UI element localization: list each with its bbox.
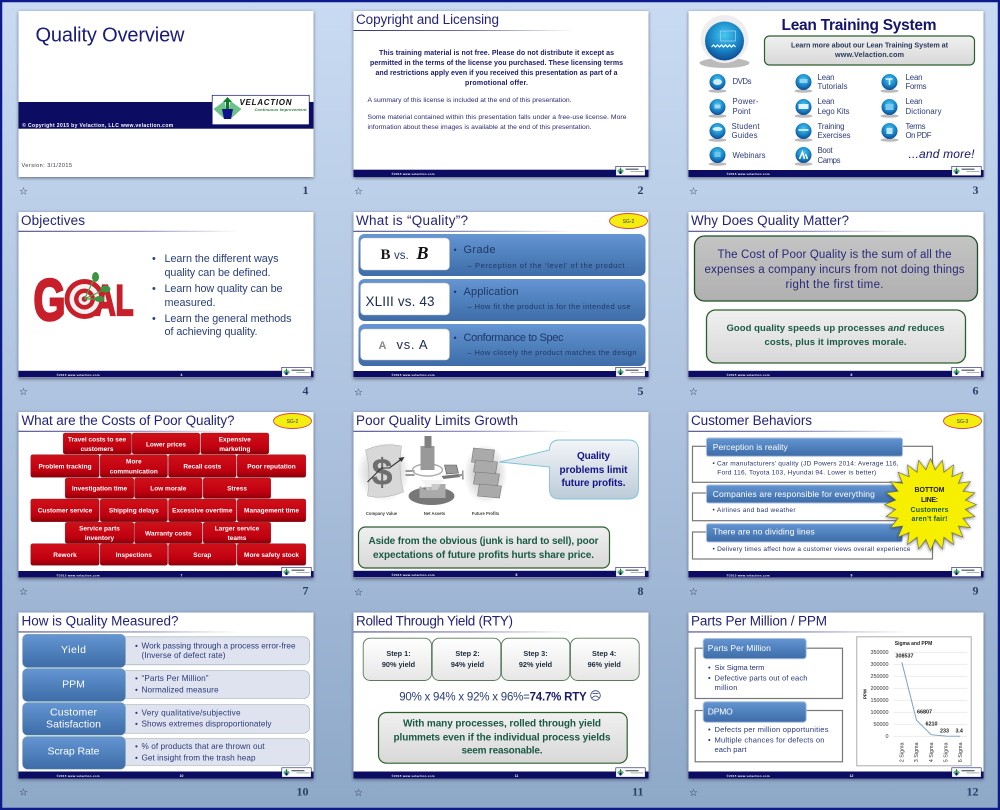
brick wall of costs: Travel costs to see: [68, 436, 126, 444]
panel: DPMO: [695, 702, 842, 762]
footer bar: [354, 567, 648, 578]
slide number: 12: [966, 784, 978, 798]
training item labels: Lean: [818, 73, 834, 82]
icon: goal target: AL: [94, 277, 134, 325]
step boxes: 92% yield: [519, 660, 552, 669]
line chart: sigma and PPM: 4 Sigma: [929, 742, 935, 762]
row: customer satisfaction: [22, 702, 310, 735]
row: customer satisfaction: Shows extremes disproportionately: [142, 720, 272, 728]
panel: share price note: [358, 527, 610, 568]
footer bar: 4: [181, 373, 183, 377]
badge: SG-2: SG-2: [287, 419, 299, 425]
slide number: 4: [302, 384, 308, 398]
line chart: sigma and PPM: 6210: [926, 722, 938, 728]
objectives list: •: [152, 283, 156, 295]
step boxes: Step 2:: [455, 649, 480, 658]
brick wall of costs: Stress: [227, 486, 247, 492]
license summary text: information about these images is available at the end of this presentation.: [368, 124, 592, 131]
footer bar: ©2015 www.velaction.com: [56, 573, 100, 577]
line chart: sigma and PPM: 3 Sigma: [914, 742, 920, 762]
training item labels: [732, 73, 942, 165]
star icon: ☆: [689, 387, 698, 398]
callout: quality problems: [500, 440, 638, 499]
slide title: Customer Behaviors: [691, 413, 812, 428]
star icon: ☆: [354, 788, 363, 799]
panel: companies responsible: Companies are responsible for everything: [713, 489, 875, 499]
footer bar: ©2015 www.velaction.com: [392, 172, 435, 176]
brick wall of costs: teams: [228, 535, 247, 542]
brick wall of costs: Excessive overtime: [172, 507, 233, 514]
slide title: Why Does Quality Matter?: [691, 213, 849, 228]
row: application: XLIII vs. 43: [366, 294, 434, 309]
row: scrap rate: Scrap Rate: [48, 746, 100, 758]
panel: good quality: [706, 310, 966, 363]
row: customer satisfaction: Satisfaction: [46, 718, 101, 730]
RTY formula: 90% x 94% x 92% x 96%=74.7% RTY: [399, 692, 587, 704]
footer bar: 9: [851, 573, 853, 577]
row: PPM: PPM: [62, 678, 85, 690]
star icon: ☆: [19, 587, 28, 598]
row: yield: Yield: [61, 644, 86, 656]
slide 8: poor quality limits growth: [354, 412, 648, 598]
illustration: company value equation: [356, 436, 508, 505]
panel: RTY note: [378, 712, 627, 763]
line chart: sigma and PPM: 350000: [870, 650, 888, 656]
footer bar: ©2015 www.velaction.com: [392, 774, 435, 778]
training item labels: Exercises: [818, 131, 851, 140]
objectives list: •: [152, 253, 156, 265]
illustration labels: Company Value: [366, 511, 398, 516]
step boxes: 94% yield: [451, 660, 484, 669]
training item labels: On PDF: [906, 131, 932, 140]
brick wall of costs: Problem tracking: [38, 464, 92, 470]
slide title: Objectives: [21, 213, 85, 228]
row: yield: [22, 634, 310, 668]
row: conformance: vs. A: [396, 337, 428, 352]
icon orbs: [708, 74, 898, 166]
star icon: ☆: [354, 388, 363, 398]
footer bar: 12: [850, 774, 853, 778]
slide 3: lean training system: [688, 11, 984, 198]
slide title: Parts Per Million / PPM: [691, 614, 827, 628]
row: customer satisfaction: Customer: [50, 706, 98, 718]
panel: parts per million: •: [708, 663, 711, 672]
line chart: sigma and PPM: 150000: [870, 698, 888, 704]
callout: bottom line starburst: aren’t fair!: [912, 516, 948, 523]
objectives list: Learn the general methods: [164, 313, 292, 325]
callout: bottom line starburst: [884, 459, 976, 551]
footer bar: [688, 768, 984, 778]
navy band: [18, 102, 314, 129]
training item labels: Guides: [732, 131, 758, 140]
panel: cost of poor quality: The Cost of Poor Quality is the sum of all the: [718, 249, 952, 261]
panel: perception is reality: • Car manufacturers’ quality (JD Powers 2014: Average 116,: [712, 460, 899, 467]
step boxes: [363, 638, 639, 680]
row: PPM: “Parts Per Million”: [142, 674, 209, 683]
brick wall of costs: Low morale: [150, 486, 187, 492]
license notice: [370, 50, 623, 87]
row: grade: B: [380, 247, 391, 263]
training item labels: Lean: [906, 73, 922, 82]
training item labels: Training: [818, 122, 844, 131]
license summary text: Some material contained within this presentation falls under a free-use license. More: [368, 114, 627, 121]
star icon: ☆: [19, 186, 28, 198]
slide title: Rolled Through Yield (RTY): [356, 614, 513, 628]
line chart: sigma and PPM: Sigma and PPM: [895, 641, 932, 647]
callout: quality problems: problems limit: [560, 465, 628, 476]
logo: Velaction: [212, 95, 309, 125]
row: conformance: A: [378, 340, 386, 352]
illustration labels: [366, 511, 500, 516]
step boxes: 96% yield: [588, 660, 621, 669]
step boxes: Step 3:: [523, 649, 548, 658]
panel: cost of poor quality: right the first time.: [786, 279, 884, 291]
illustration labels: Net Assets: [424, 511, 446, 516]
row: PPM: •: [135, 674, 138, 683]
footer bar: 6: [851, 373, 853, 377]
footer bar: 10: [180, 774, 183, 778]
training item labels: Boot: [818, 146, 833, 155]
training item labels: Lean: [818, 97, 834, 106]
panel: companies responsible: [692, 485, 932, 521]
version note: Version: 3/1/2015: [22, 163, 72, 169]
license notice: This training material is not free. Please do not distribute it except as: [379, 50, 614, 57]
footer bar: ©2015 www.velaction.com: [726, 573, 770, 577]
objectives list: [152, 253, 292, 338]
row: yield: (Inverse of defect rate): [142, 651, 226, 660]
footer bar: 7: [181, 573, 183, 577]
brick wall of costs: More safety stock: [244, 552, 299, 559]
panel: no dividing lines: There are no dividing lines: [713, 526, 815, 536]
panel: parts per million: Defective parts out of each: [714, 674, 808, 682]
slide number: 11: [632, 784, 644, 798]
training item labels: Power-: [732, 97, 759, 106]
panel: parts per million: Six Sigma term: [714, 663, 764, 672]
brick wall of costs: Lower prices: [146, 442, 186, 448]
objectives list: Learn the different ways: [164, 253, 279, 265]
row: PPM: Normalized measure: [142, 686, 219, 694]
training item labels: Terms: [906, 122, 926, 131]
line chart: sigma and PPM: 300000: [870, 662, 888, 668]
line chart: sigma and PPM: PPM: [862, 689, 868, 699]
panel: cost of poor quality: [694, 236, 978, 301]
brick wall of costs: Rework: [53, 552, 77, 559]
row: grade: vs.: [394, 250, 409, 262]
objectives list: quality can be defined.: [164, 267, 270, 279]
footer bar: ©2015 www.velaction.com: [392, 373, 435, 377]
line chart: sigma and PPM: 3.4: [955, 728, 963, 734]
panel: DPMO: DPMO: [708, 706, 733, 716]
footer bar: ©2015 www.velaction.com: [392, 573, 435, 577]
training item labels: Student: [732, 122, 760, 131]
training item labels: Camps: [818, 156, 841, 165]
panel: cost of poor quality: expenses a company incurs from not doing things: [704, 264, 965, 276]
line chart: sigma and PPM: 5 Sigma: [944, 742, 950, 762]
slide 11: rolled through yield: [354, 612, 648, 799]
footer bar: [354, 768, 648, 778]
panel: perception is reality: [692, 438, 932, 482]
row: scrap rate: % of products that are thrown out: [142, 742, 265, 751]
row: grade: Grade: [464, 244, 496, 256]
training item labels: Lego Kits: [818, 107, 850, 116]
objectives list: of achieving quality.: [164, 326, 258, 338]
icon: large orb: [700, 15, 750, 68]
row: grade: [358, 234, 646, 276]
slide title: How is Quality Measured?: [22, 614, 178, 628]
callout: bottom line starburst: Customers: [910, 507, 949, 514]
row: scrap rate: •: [135, 742, 138, 751]
brick wall of costs: Expensive: [219, 436, 251, 444]
star icon: ☆: [689, 788, 698, 799]
row: yield: Work passing through a process error-free: [142, 642, 296, 650]
and more note: ...and more!: [908, 147, 975, 161]
footer bar: 8: [516, 573, 518, 577]
copyright line: © Copyright 2015 by Velaction, LLC www.velaction.com: [22, 122, 174, 129]
panel: good quality: costs, plus it improves morale.: [764, 337, 906, 348]
row: scrap rate: •: [135, 754, 138, 762]
slide number: 7: [302, 584, 308, 598]
row: PPM: •: [135, 686, 138, 694]
footer bar: [18, 367, 314, 378]
slide number: 6: [972, 384, 978, 398]
badge: SG-2: [610, 214, 648, 228]
line chart: sigma and PPM: [857, 637, 971, 766]
footer bar: ©2015 www.velaction.com: [726, 172, 770, 176]
training item labels: Tutorials: [818, 82, 848, 91]
brick wall of costs: customers: [81, 446, 114, 453]
brick wall of costs: [31, 433, 306, 565]
slide number: 1: [302, 183, 308, 197]
line chart: sigma and PPM: 200000: [870, 686, 888, 692]
step boxes: 90% yield: [382, 660, 415, 669]
license summary text: A summary of this license is included at the end of this presentation.: [368, 97, 572, 104]
brick wall of costs: Service parts: [79, 526, 120, 532]
row: application: •: [454, 287, 457, 297]
brick wall of costs: Management time: [244, 507, 299, 514]
panel: DPMO: each part: [714, 745, 747, 754]
training item labels: Forms: [906, 82, 927, 91]
badge: SG-3: [944, 414, 982, 428]
training item labels: DVDs: [732, 77, 752, 86]
panel: RTY note: seem reasonable.: [462, 746, 543, 756]
row: customer satisfaction: •: [135, 708, 138, 718]
brick wall of costs: Larger service: [215, 526, 260, 532]
brick wall of costs: communication: [110, 468, 158, 476]
slide 12: parts per million: [688, 612, 984, 799]
panel: DPMO: •: [708, 736, 711, 744]
panel: good quality: Good quality speeds up processes and reduces: [726, 323, 944, 334]
license notice: permitted in the terms of the license you purchased. These licensing terms: [370, 60, 623, 67]
logo: Velaction: Continuous Improvement: [254, 107, 307, 112]
panel: parts per million: •: [708, 674, 711, 682]
brick wall of costs: Shipping delays: [109, 507, 159, 514]
row: application: [358, 279, 646, 321]
panel: share price note: expectations of future profits hurts share price.: [373, 550, 594, 561]
panel: parts per million: [695, 638, 842, 698]
brick wall of costs: Scrap: [193, 552, 211, 559]
slide title: What are the Costs of Poor Quality?: [22, 413, 234, 428]
slide number: 10: [296, 784, 308, 798]
panel: companies responsible: • Airlines and bad weather: [712, 507, 796, 514]
panel: no dividing lines: [692, 524, 932, 559]
footer bar: [688, 166, 984, 177]
callout: bottom line starburst: BOTTOM: [914, 487, 945, 494]
panel: DPMO: •: [708, 725, 711, 734]
logo: Velaction: VELACTION: [240, 98, 292, 107]
step boxes: Step 1:: [386, 649, 411, 658]
training item labels: Point: [732, 107, 751, 116]
objectives list: Learn how quality can be: [164, 283, 282, 295]
footer bar: [688, 367, 984, 378]
row: conformance: – How closely the product matches the design: [468, 348, 636, 357]
panel: perception is reality: Ford 116, Toyota 103, Hyundai 94. Lower is better): [717, 469, 876, 476]
line chart: sigma and PPM: 2 Sigma: [900, 742, 906, 762]
brick wall of costs: inventory: [85, 535, 115, 542]
training item labels: Dictionary: [906, 107, 942, 116]
slide 9: customer behaviors: [688, 412, 984, 598]
footer bar: ©2015 www.velaction.com: [56, 774, 100, 778]
row: grade: B: [416, 243, 429, 263]
line chart: sigma and PPM: 308537: [896, 654, 914, 660]
row: application: – How fit the product is for the intended use: [468, 302, 630, 311]
footer bar: ©2015 www.velaction.com: [726, 774, 770, 778]
panel: DPMO: Multiple chances for defects on: [714, 736, 824, 744]
row: conformance: •: [454, 333, 457, 343]
line chart: sigma and PPM: 6 Sigma: [958, 742, 964, 762]
license notice: promotional offer.: [465, 80, 528, 87]
line chart: sigma and PPM: 250000: [870, 674, 888, 680]
slide title: Quality Overview: [36, 24, 185, 46]
slide 2: copyright and licensing: [354, 11, 648, 198]
panel: parts per million: Parts Per Million: [708, 643, 771, 653]
panel: share price note: Aside from the obvious (junk is hard to sell), poor: [368, 536, 599, 547]
slide number: 2: [638, 183, 644, 197]
row: yield: •: [135, 642, 138, 650]
footer bar: [354, 166, 648, 177]
badge: SG-3: SG-3: [957, 419, 969, 425]
icon: goal target: G: [34, 268, 66, 333]
callout: learn more: [764, 36, 974, 65]
training item labels: Webinars: [732, 151, 766, 160]
panel: RTY note: plummets even if the individual process yields: [394, 732, 611, 744]
row: customer satisfaction: Very qualitative/subjective: [142, 708, 241, 718]
row: PPM: [22, 668, 310, 702]
license summary text: [368, 97, 627, 131]
row: grade: – Perception of the ‘level’ of the product: [468, 261, 625, 270]
brick wall of costs: Investigation time: [72, 486, 128, 492]
footer bar: [688, 567, 984, 578]
callout: learn more: www.Velaction.com: [834, 50, 904, 59]
star icon: ☆: [19, 387, 28, 398]
icon: goal target: [34, 268, 134, 333]
license notice: and restrictions apply even if you received this presentation as part of a: [376, 70, 618, 77]
footer bar: ©2015 www.velaction.com: [56, 373, 100, 377]
footer bar: ©2015 www.velaction.com: [726, 373, 770, 377]
brick wall of costs: marketing: [219, 446, 250, 453]
brick wall of costs: More: [126, 458, 142, 466]
slide number: 9: [972, 584, 978, 598]
line chart: sigma and PPM: 50000: [874, 722, 888, 728]
slide title: What is “Quality”?: [356, 213, 468, 228]
brick wall of costs: Poor reputation: [247, 464, 296, 470]
brick wall of costs: Warranty costs: [145, 530, 192, 538]
illustration labels: Future Profits: [472, 511, 500, 516]
slide 5: what is quality: [354, 212, 648, 398]
step boxes: Step 4:: [592, 649, 616, 658]
footer bar: [18, 768, 314, 778]
brick wall of costs: Inspections: [116, 552, 152, 559]
line chart: sigma and PPM: 233: [940, 728, 949, 734]
row: customer satisfaction: •: [135, 720, 138, 728]
row: application: Application: [464, 286, 518, 298]
panel: DPMO: Defects per million opportunities: [714, 725, 829, 734]
brick wall of costs: Recall costs: [183, 464, 222, 470]
star icon: ☆: [689, 186, 698, 198]
panel: parts per million: million: [714, 683, 738, 692]
slide title: Copyright and Licensing: [356, 12, 499, 27]
slide 4: objectives: [18, 212, 314, 398]
panel: no dividing lines: • Delivery times affect how a customer views overall experience: [712, 546, 911, 553]
row: grade: •: [454, 245, 457, 255]
footer bar: 11: [515, 774, 518, 778]
objectives list: measured.: [164, 297, 216, 309]
line chart: sigma and PPM: 66807: [917, 710, 932, 716]
line chart: sigma and PPM: 100000: [870, 710, 888, 716]
badge: SG-2: [274, 414, 312, 428]
slide number: 3: [972, 183, 978, 197]
badge: SG-2: SG-2: [623, 219, 635, 225]
slide 6: why does quality matter: [688, 212, 984, 398]
row: scrap rate: [22, 736, 310, 769]
icon: frown: [591, 691, 600, 700]
footer bar: [354, 367, 648, 378]
panel: RTY note: With many processes, rolled through yield: [403, 718, 601, 730]
star icon: ☆: [19, 788, 28, 798]
row: conformance: Conformance to Spec: [464, 332, 564, 344]
star icon: ☆: [354, 186, 363, 198]
line chart: sigma and PPM: 0: [886, 734, 888, 740]
slide number: 5: [638, 384, 644, 398]
row: conformance: [358, 324, 646, 366]
slide 10: how is quality measured: [18, 612, 314, 798]
row: scrap rate: Get insight from the trash heap: [142, 754, 256, 762]
star icon: ☆: [354, 588, 363, 598]
callout: learn more: Learn more about our Lean Training System at: [791, 41, 949, 50]
slide number: 8: [638, 584, 644, 598]
illustration: company value equation: $: [372, 452, 393, 494]
slide 7: costs of poor quality: [18, 412, 314, 598]
objectives list: •: [152, 313, 156, 325]
callout: quality problems: Quality: [577, 451, 610, 462]
star icon: ☆: [689, 587, 698, 598]
brick wall of costs: Customer service: [38, 507, 93, 514]
callout: quality problems: future profits.: [562, 478, 626, 489]
footer bar: [18, 567, 314, 578]
slide title: Poor Quality Limits Growth: [356, 413, 518, 428]
slide title: Lean Training System: [782, 17, 936, 34]
panel: perception is reality: Perception is reality: [713, 442, 789, 452]
slide 1: title slide: [18, 11, 314, 198]
callout: bottom line starburst: LINE:: [921, 497, 938, 504]
training item labels: Lean: [906, 97, 922, 106]
